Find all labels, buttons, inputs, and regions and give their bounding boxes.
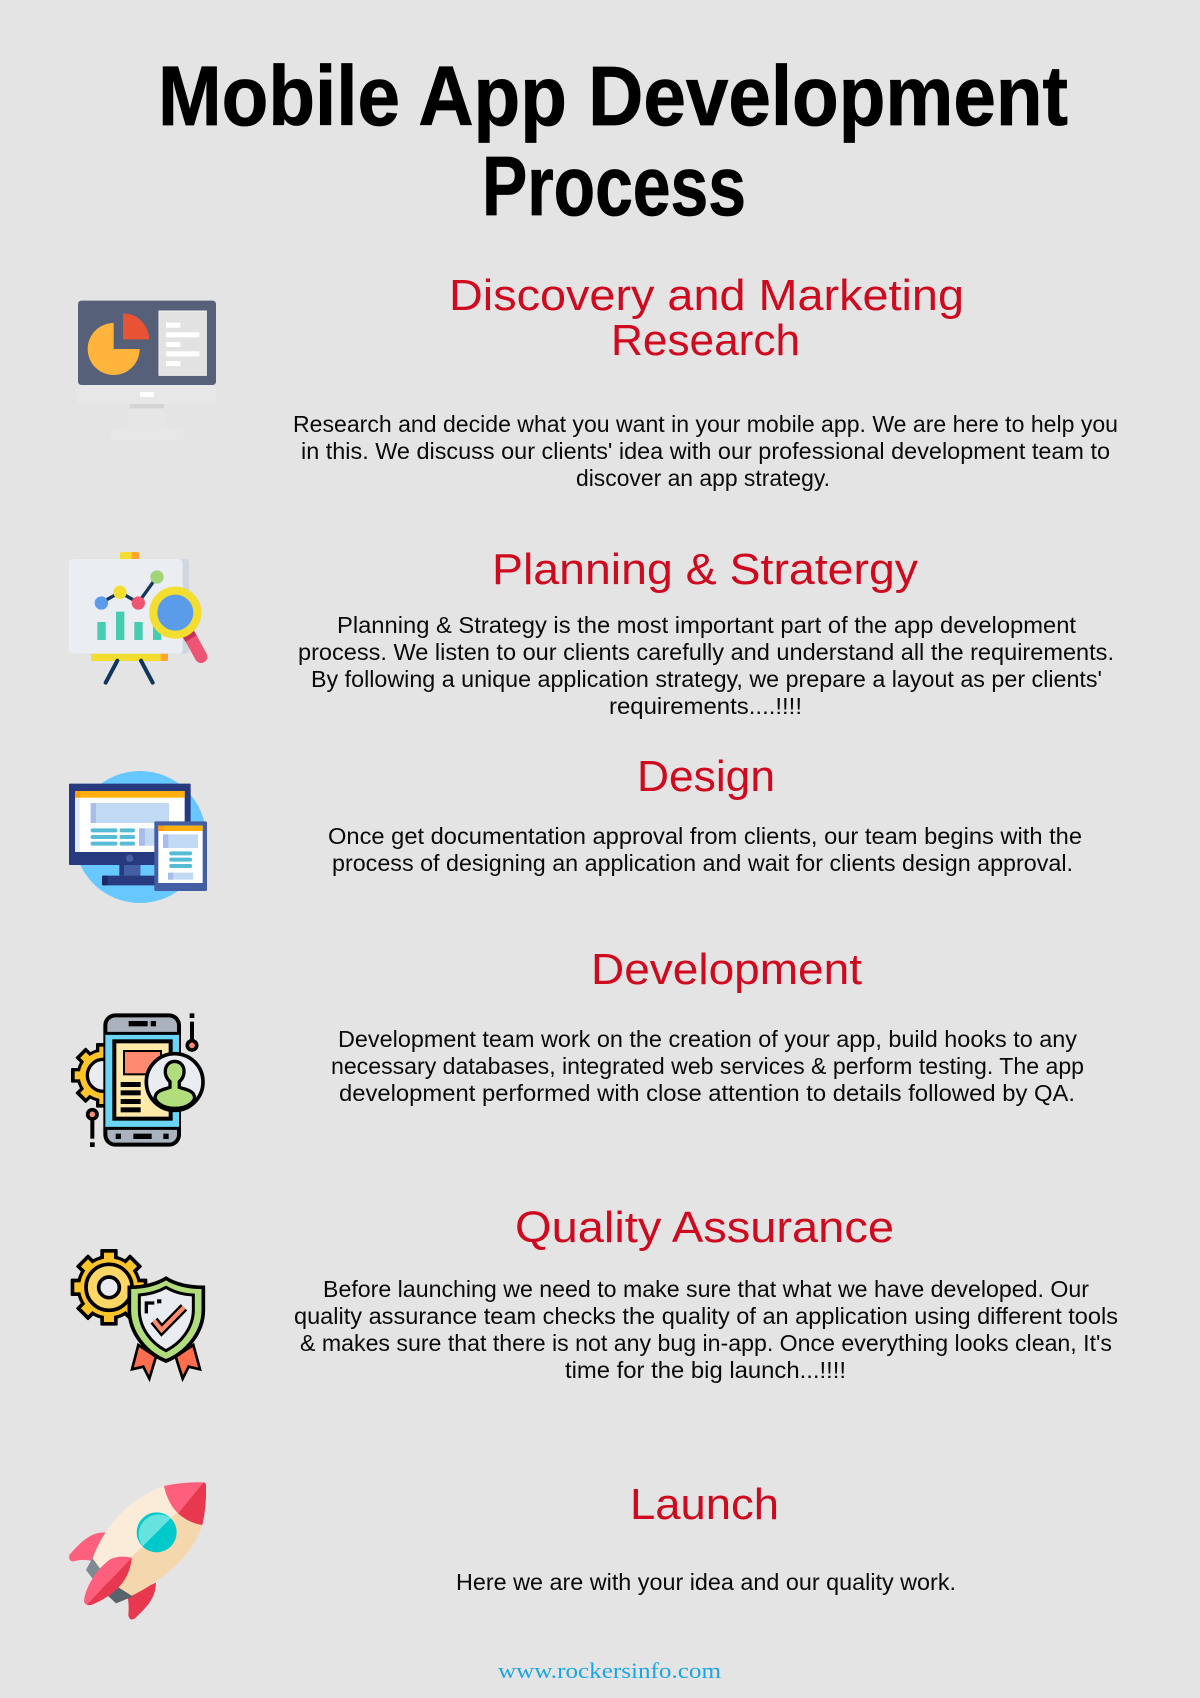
icon: gear and shield — [71, 1249, 203, 1379]
icon: phone with gear and user — [71, 1013, 203, 1147]
title: Mobile App Development — [158, 49, 1068, 143]
text: quality assurance description — [294, 1276, 1118, 1383]
heading: quality assurance: Quality Assurance — [515, 1203, 894, 1252]
text: quality assurance description: quality assurance team checks the quality of an application using different tools — [294, 1303, 1118, 1329]
text: planning description: requirements....!!!! — [609, 693, 802, 719]
text: design description — [328, 823, 1082, 876]
text: development description: necessary databases, integrated web services & perform testing. The app — [331, 1053, 1084, 1079]
icon: presentation board with magnifier — [69, 552, 201, 683]
panel: launch — [69, 1480, 956, 1619]
heading: development: Development — [591, 945, 862, 994]
text: launch description: Here we are with your idea and our quality work. — [456, 1569, 956, 1595]
text: quality assurance description: & makes sure that there is not any bug in-app. Once everything looks clean, It's — [300, 1330, 1112, 1356]
text: planning description — [298, 612, 1114, 719]
title: Process — [482, 139, 746, 233]
text: development description — [331, 1026, 1084, 1106]
title — [158, 49, 1068, 233]
text: planning description: Planning & Strategy is the most important part of the app development — [337, 612, 1076, 638]
text: quality assurance description: time for the big launch...!!!! — [565, 1357, 846, 1383]
text: discovery description: in this. We discuss our clients' idea with our professional development team to — [301, 438, 1110, 464]
panel: design — [69, 752, 1082, 903]
panel: quality assurance — [71, 1203, 1118, 1383]
footer url: www.rockersinfo.com — [498, 1658, 721, 1683]
icon: rocket — [69, 1482, 206, 1619]
icon: monitor with pie chart — [78, 301, 216, 440]
panel: development — [71, 945, 1084, 1147]
text: quality assurance description: Before launching we need to make sure that what we have developed. Our — [323, 1276, 1089, 1302]
text: discovery description: discover an app strategy. — [576, 465, 830, 491]
text: design description: process of designing an application and wait for clients design approval. — [332, 850, 1073, 876]
text: development description: development performed with close attention to details followed by QA. — [339, 1080, 1075, 1106]
panel: planning and strategy — [69, 545, 1114, 719]
panel: discovery and marketing research — [78, 271, 1118, 491]
text: planning description: By following a unique application strategy, we prepare a layout as per clients' — [311, 666, 1102, 692]
heading: discovery — [449, 271, 964, 365]
text: discovery description: Research and decide what you want in your mobile app. We are here to help you — [293, 411, 1118, 437]
text: development description: Development team work on the creation of your app, build hooks to any — [338, 1026, 1077, 1052]
heading: discovery: Research — [611, 316, 800, 365]
text: design description: Once get documentation approval from clients, our team begins with the — [328, 823, 1082, 849]
heading: discovery: Discovery and Marketing — [449, 271, 964, 320]
icon: desktop and tablet screens — [69, 771, 207, 903]
heading: launch: Launch — [630, 1480, 779, 1529]
text: planning description: process. We listen to our clients carefully and understand all the requirements. — [298, 639, 1114, 665]
heading: design: Design — [637, 752, 775, 801]
text: discovery description — [293, 411, 1118, 491]
heading: planning: Planning & Stratergy — [492, 545, 918, 594]
